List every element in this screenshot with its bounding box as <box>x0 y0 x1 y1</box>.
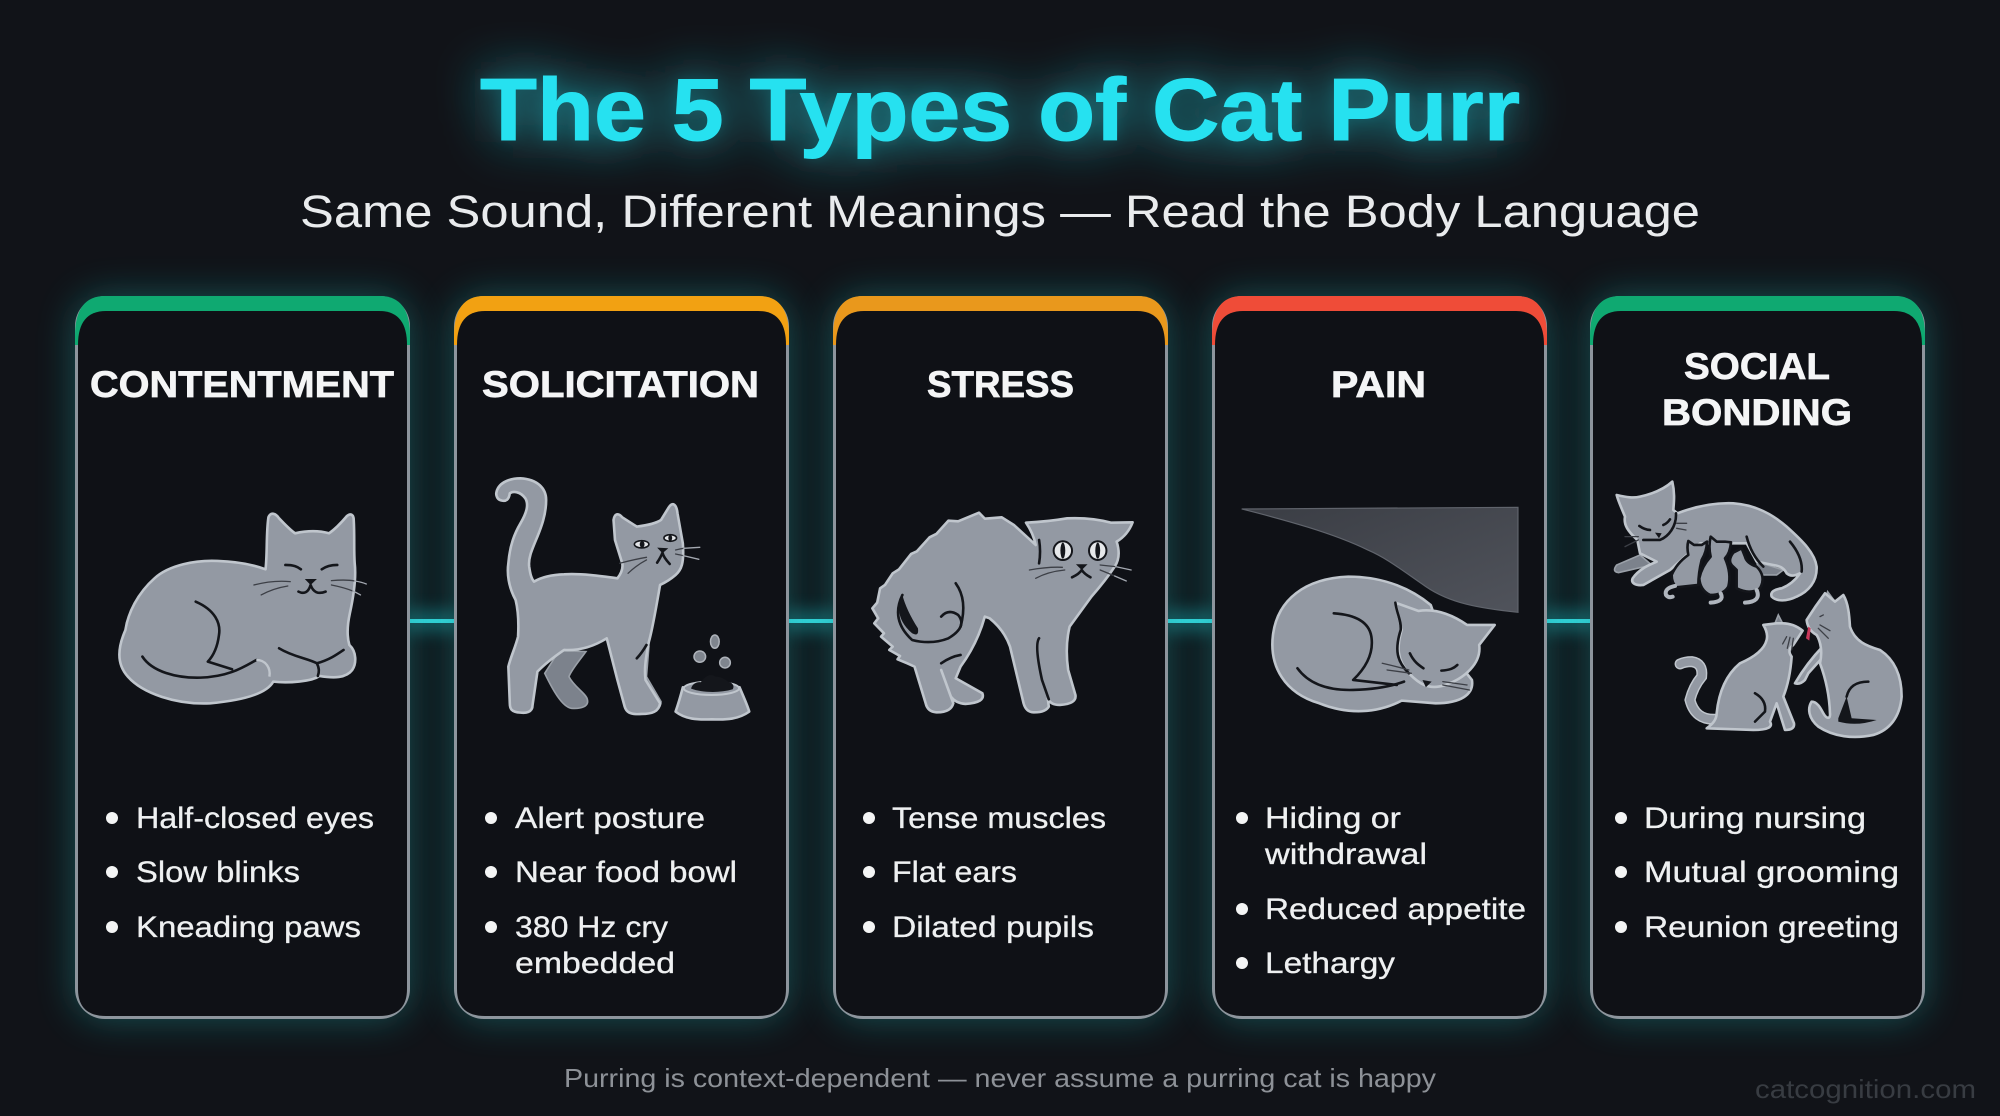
bullet list: withdrawal <box>1264 838 1427 871</box>
bullet list: Half-closed eyes <box>136 802 374 835</box>
bullet list: During nursing <box>1644 802 1866 835</box>
panel: contentment <box>75 296 410 1019</box>
panel: pain <box>1212 296 1547 1019</box>
bullet list <box>1615 802 1899 944</box>
bullet list: Hiding or <box>1265 802 1401 835</box>
bullet list: Slow blinks <box>136 856 300 889</box>
bullet list <box>485 802 737 980</box>
bullet list <box>863 802 1106 944</box>
heading <box>1662 346 1852 433</box>
panel: social bonding <box>1590 296 1925 1019</box>
bullet list: Mutual grooming <box>1644 856 1899 889</box>
watermark: catcognition.com <box>1755 1074 1976 1104</box>
bullet list: embedded <box>515 947 675 980</box>
bullet list: Kneading paws <box>136 911 361 944</box>
bullet list: Tense muscles <box>892 802 1106 835</box>
icon: nursing mother with kittens and grooming pair <box>1615 482 1902 737</box>
bullet list <box>1236 802 1526 980</box>
heading: PAIN <box>1331 364 1426 405</box>
bullet list: Flat ears <box>892 856 1017 889</box>
connector lines between cards <box>405 610 1596 632</box>
bullet list: Reduced appetite <box>1265 893 1526 926</box>
subtitle: Same Sound, Different Meanings — Read the Body Language <box>300 186 1700 237</box>
icon: begging cat with food bowl <box>496 478 749 719</box>
heading: SOLICITATION <box>482 364 759 405</box>
bullet list: Dilated pupils <box>892 911 1094 944</box>
icon: hiding curled cat under shelter <box>1242 507 1518 711</box>
bullet list: 380 Hz cry <box>515 911 668 944</box>
bullet list <box>106 802 374 944</box>
footer note: Purring is context-dependent — never assume a purring cat is happy <box>564 1063 1436 1093</box>
icon: relaxed lying cat <box>119 514 366 703</box>
bullet list: Reunion greeting <box>1644 911 1899 944</box>
panel: solicitation <box>454 296 789 1019</box>
bullet list: Near food bowl <box>515 856 737 889</box>
bullet list: Alert posture <box>515 802 705 835</box>
panel: stress <box>833 296 1168 1019</box>
heading: SOCIAL <box>1684 346 1830 387</box>
heading: BONDING <box>1662 392 1852 433</box>
bullet list: Lethargy <box>1265 947 1395 980</box>
title: The 5 Types of Cat Purr <box>480 60 1520 159</box>
icon: arched stressed cat <box>872 513 1133 712</box>
heading: STRESS <box>927 364 1074 405</box>
heading: CONTENTMENT <box>90 364 394 405</box>
